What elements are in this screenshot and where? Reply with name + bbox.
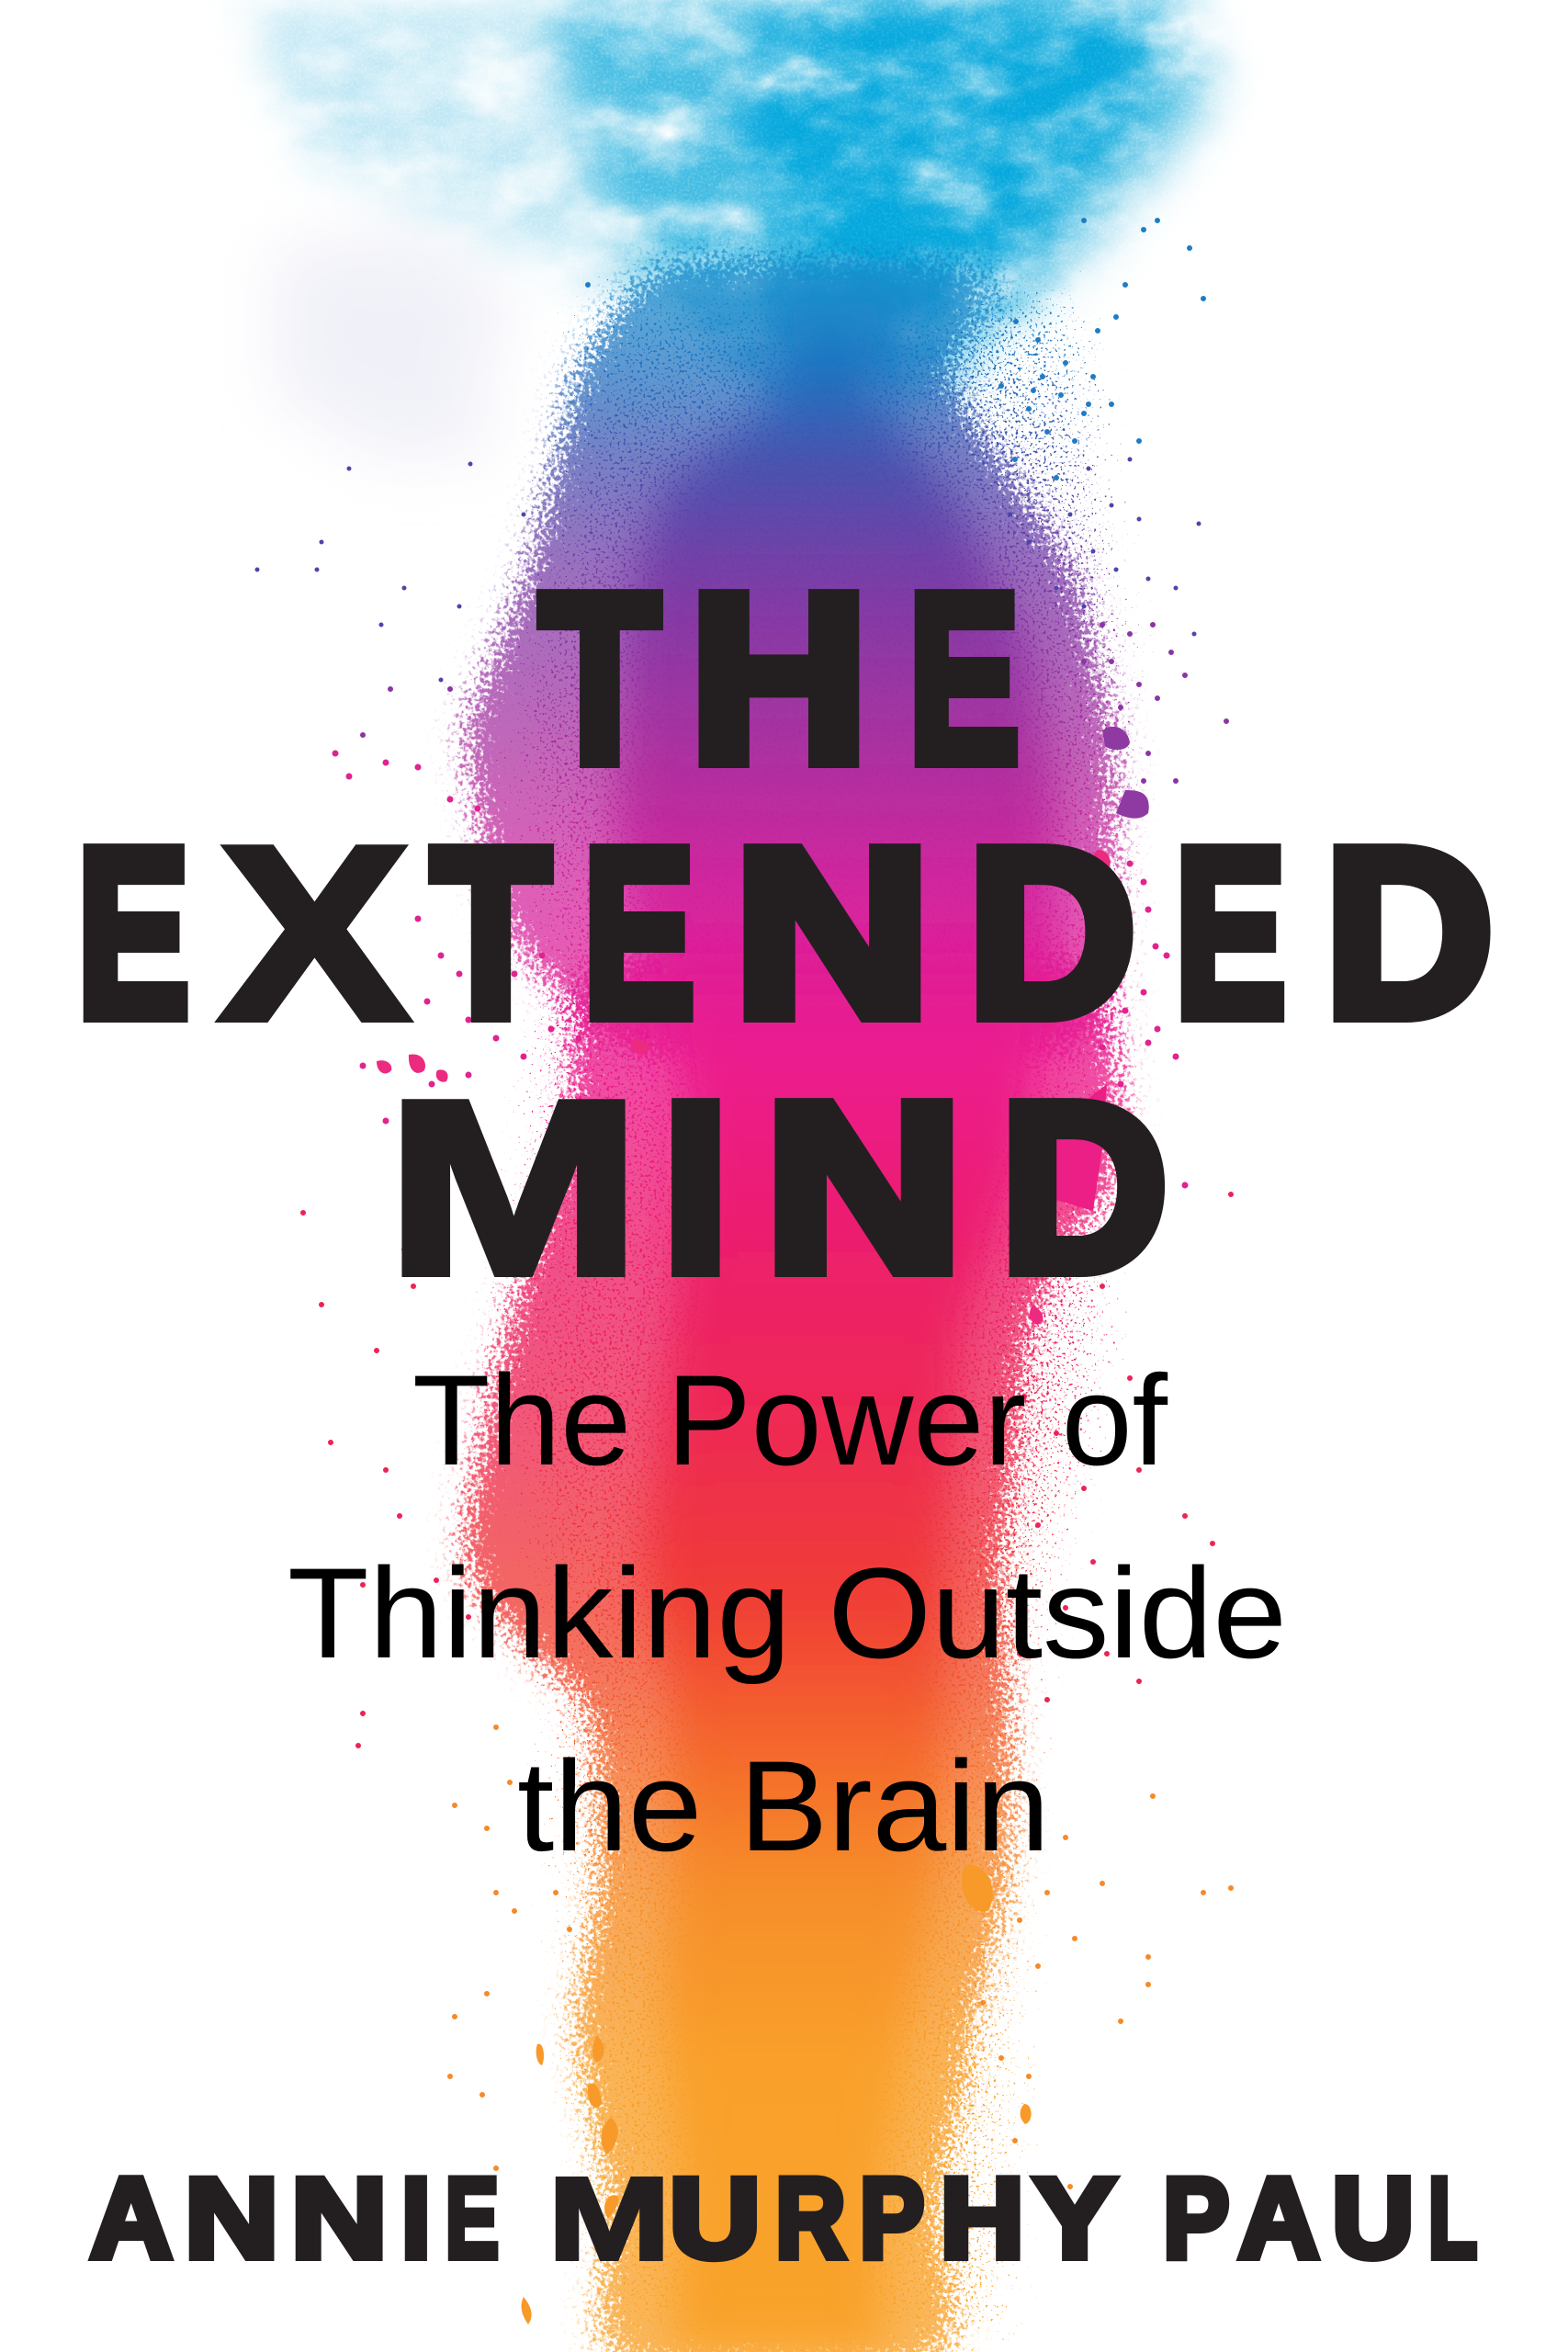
fragment behind the D of MIND [1053, 1084, 1107, 1211]
title: MIND: M [386, 1050, 641, 1327]
author name: N [291, 2155, 388, 2282]
chunks: purple [1102, 727, 1149, 819]
title: THE: H [690, 546, 868, 812]
fine specks: blue [588, 220, 1203, 478]
author name: I [401, 2155, 431, 2282]
fine specks: red [303, 1194, 1231, 1746]
cyan cloud [551, 0, 1203, 413]
author name: A [1238, 2155, 1319, 2282]
title: EXTENDED: N [734, 800, 931, 1067]
title: MIND: N [765, 1055, 963, 1321]
title: EXTENDED: E [583, 800, 694, 1067]
author name: U [1332, 2155, 1415, 2282]
fine specks: indigo [257, 459, 1199, 680]
author name: P [1163, 2155, 1229, 2282]
spray of fine powder around the column [487, 276, 1139, 2352]
title: EXTENDED: X [220, 796, 411, 1072]
title: MIND: I [663, 1055, 728, 1321]
author name: P [860, 2155, 924, 2282]
author name: E [446, 2155, 499, 2282]
author name: A [90, 2155, 173, 2282]
chunks: orange [522, 1865, 1032, 2324]
author name: U [670, 2155, 761, 2282]
title: EXTENDED: T [432, 800, 550, 1067]
title: THE: E [908, 546, 1020, 812]
subtitle line 2: Thinking Outside [288, 1541, 1287, 1685]
author name: L [1428, 2155, 1477, 2282]
title: MIND: D [1001, 1055, 1168, 1321]
title: EXTENDED: D [968, 800, 1135, 1067]
pale lavender cloud [276, 230, 514, 459]
author name: H [940, 2155, 1024, 2282]
fine specks: purple [363, 625, 1226, 781]
dense cyan plume [735, 0, 1148, 395]
dense colour core [643, 974, 1047, 2352]
author name: Y [1033, 2155, 1114, 2282]
subtitle line 1: The Power of [412, 1348, 1168, 1492]
chunks: pink [377, 850, 1110, 1325]
author name: R [775, 2155, 846, 2282]
subtitle line 3: the Brain [517, 1734, 1050, 1878]
fine specks: orange [450, 1727, 1231, 2187]
title: THE: T [540, 546, 660, 812]
dense funnel [615, 276, 1056, 1029]
author name: M [548, 2154, 671, 2285]
lower powder envelope [477, 974, 1105, 2352]
title: EXTENDED: D [1325, 800, 1493, 1067]
pale blue cloud [248, 0, 1222, 312]
powder explosion [248, 0, 1240, 2352]
upper powder envelope [479, 276, 1098, 1038]
title: EXTENDED: E [77, 800, 189, 1067]
title: EXTENDED: E [1175, 800, 1286, 1067]
author name: N [185, 2155, 279, 2282]
fine specks: pink [335, 753, 1240, 1185]
